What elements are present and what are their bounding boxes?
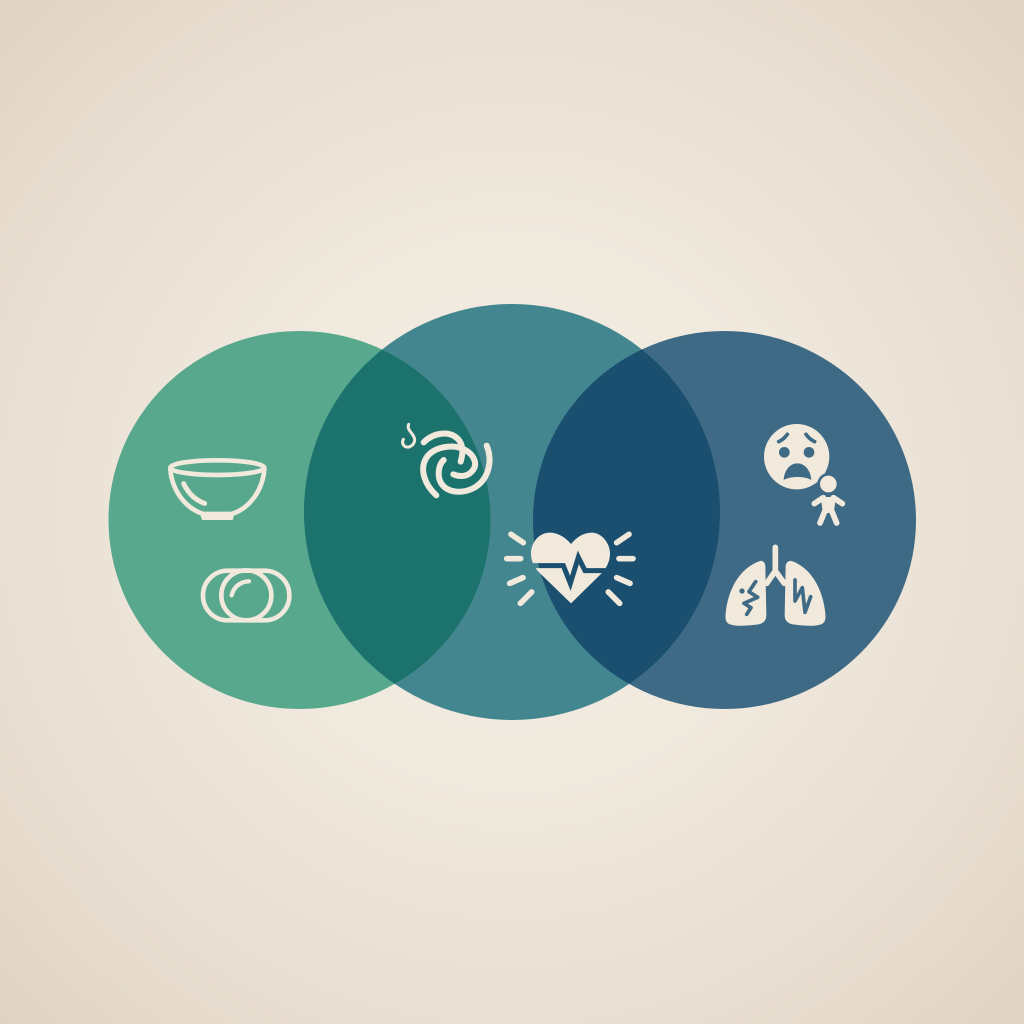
icon: heart with pulse: [507, 533, 633, 603]
overlap: left and middle: [304, 350, 490, 684]
icon: pill capsule lens: [203, 570, 289, 620]
icon: swirl with wisp: [403, 424, 490, 495]
heart body: [531, 533, 610, 603]
heart rays: [507, 534, 633, 603]
overlap: middle and right: [533, 350, 720, 684]
circle: right blue: [533, 331, 916, 709]
icon: lungs: [725, 547, 826, 626]
icon: child figure: [814, 476, 842, 523]
icon: frightened face: [764, 424, 839, 495]
venn diagram: [108, 304, 916, 720]
circle: middle teal: [304, 304, 720, 720]
circle: left green: [108, 331, 490, 709]
icon: bowl: [170, 460, 264, 520]
